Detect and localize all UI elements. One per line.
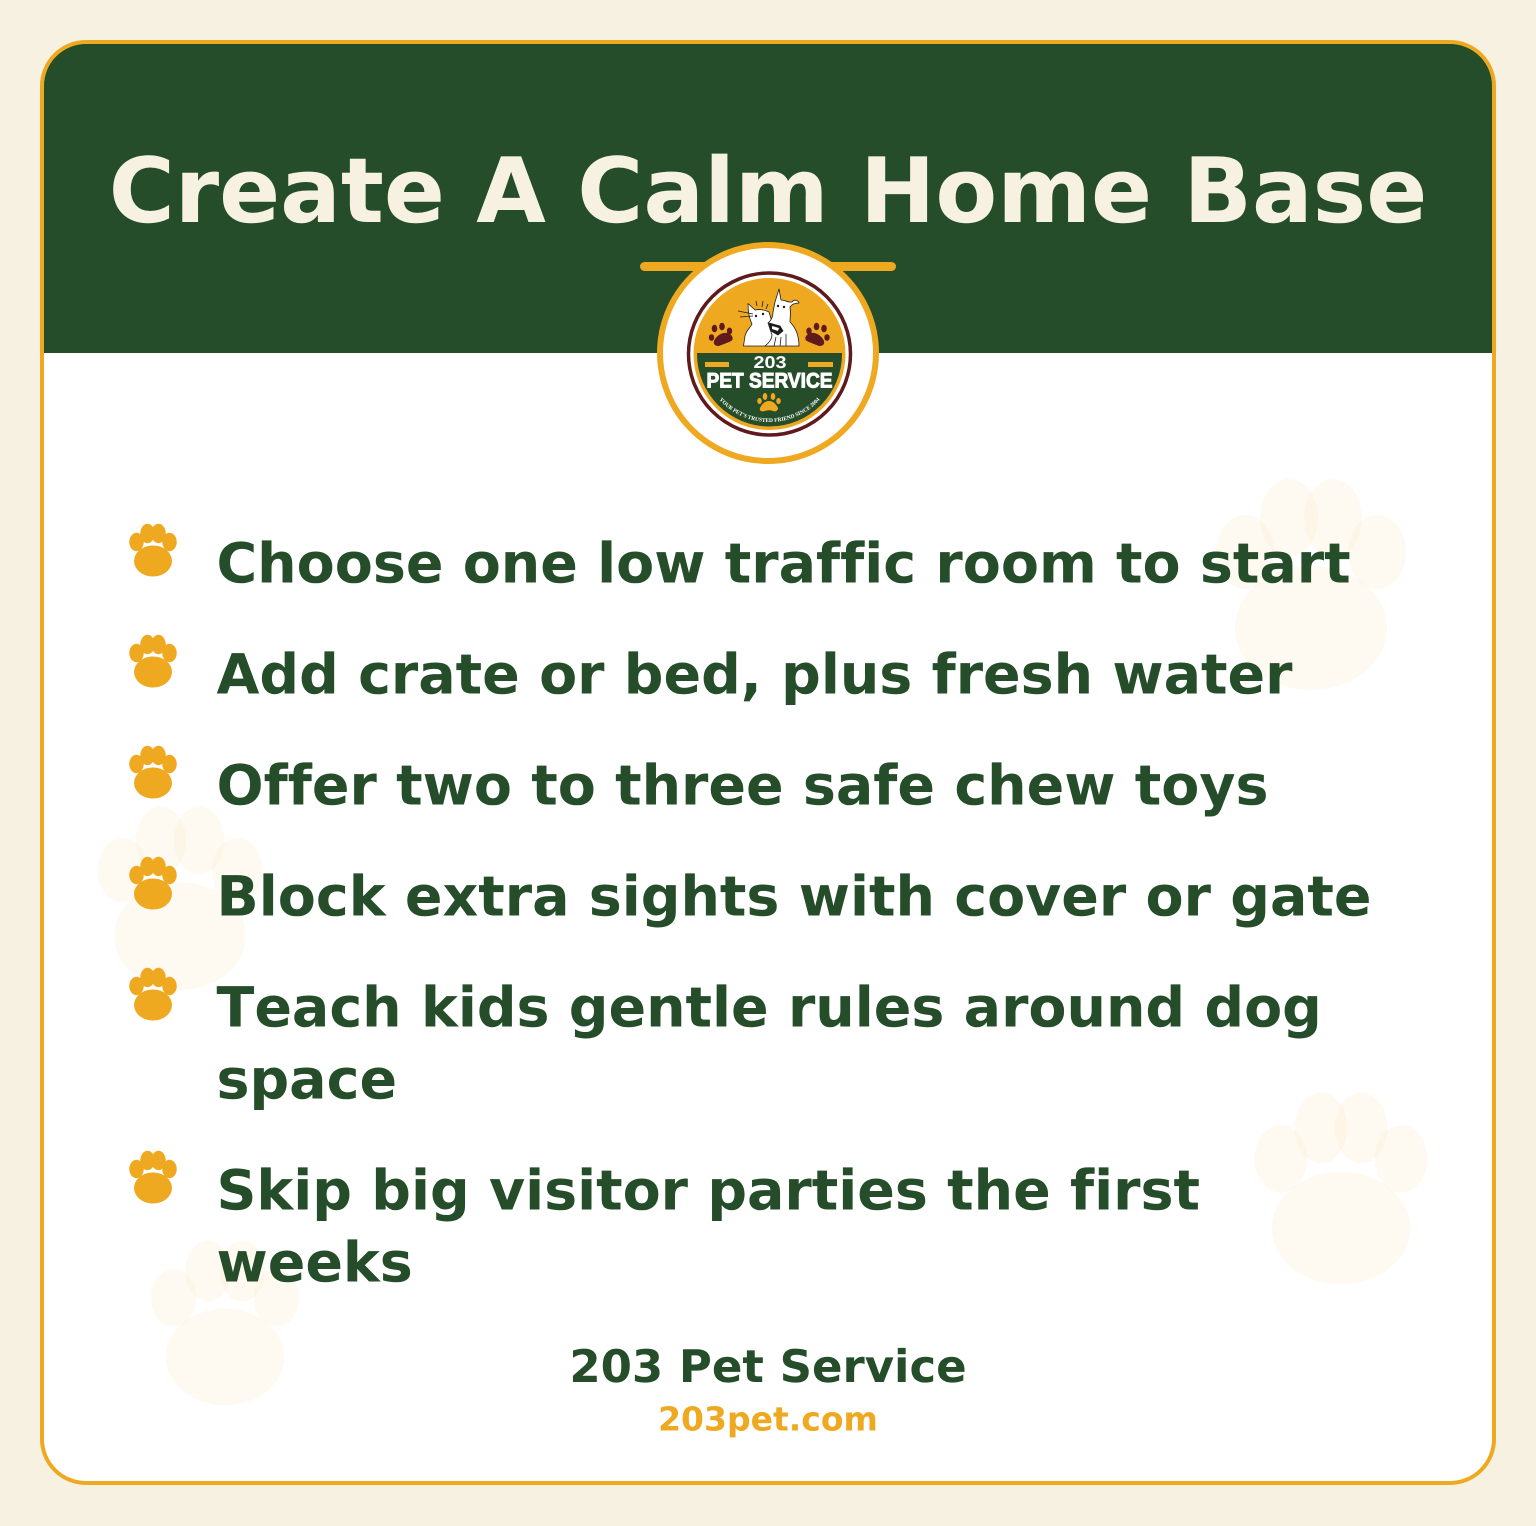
- bullet list: [129, 524, 1371, 1296]
- item 6: weeks: [216, 1232, 413, 1296]
- logo paw right: [805, 323, 830, 346]
- item 5: [129, 968, 1322, 1112]
- logo amber disc: [694, 278, 846, 430]
- item 2: Add crate or bed, plus fresh water: [216, 644, 1293, 708]
- logo paw left: [709, 323, 733, 346]
- logo paw center: [757, 393, 781, 411]
- logo tagline: YOUR PET'S TRUSTED FRIEND SINCE 2004: [720, 397, 820, 422]
- header band: [42, 42, 1494, 353]
- item 6: Skip big visitor parties the first: [216, 1160, 1200, 1224]
- logo text pet service: PET SERVICE: [706, 370, 832, 392]
- logo bars: [705, 362, 833, 367]
- logo text 203: 203: [754, 353, 786, 372]
- logo green panel: [697, 353, 842, 426]
- item 5: Teach kids gentle rules around dog: [216, 976, 1322, 1040]
- item 3: Offer two to three safe chew toys: [216, 754, 1268, 818]
- title underline: [640, 262, 896, 271]
- item 5: space: [216, 1048, 397, 1112]
- logo badge: [657, 242, 879, 464]
- footer website: 203pet.com: [658, 1400, 878, 1438]
- logo ring: [688, 273, 850, 435]
- background paw: lower right: [1255, 1092, 1427, 1284]
- background paw: left: [98, 807, 262, 990]
- logo cat and dog: [738, 289, 799, 346]
- background paw: top right: [1216, 479, 1406, 690]
- item 4: Block extra sights with cover or gate: [216, 866, 1371, 930]
- title: Create A Calm Home Base: [109, 139, 1427, 244]
- background paw: bottom left: [151, 1241, 299, 1405]
- item 6: [129, 1151, 1200, 1296]
- item 1: Choose one low traffic room to start: [216, 532, 1351, 596]
- footer brand name: 203 Pet Service: [569, 1340, 967, 1393]
